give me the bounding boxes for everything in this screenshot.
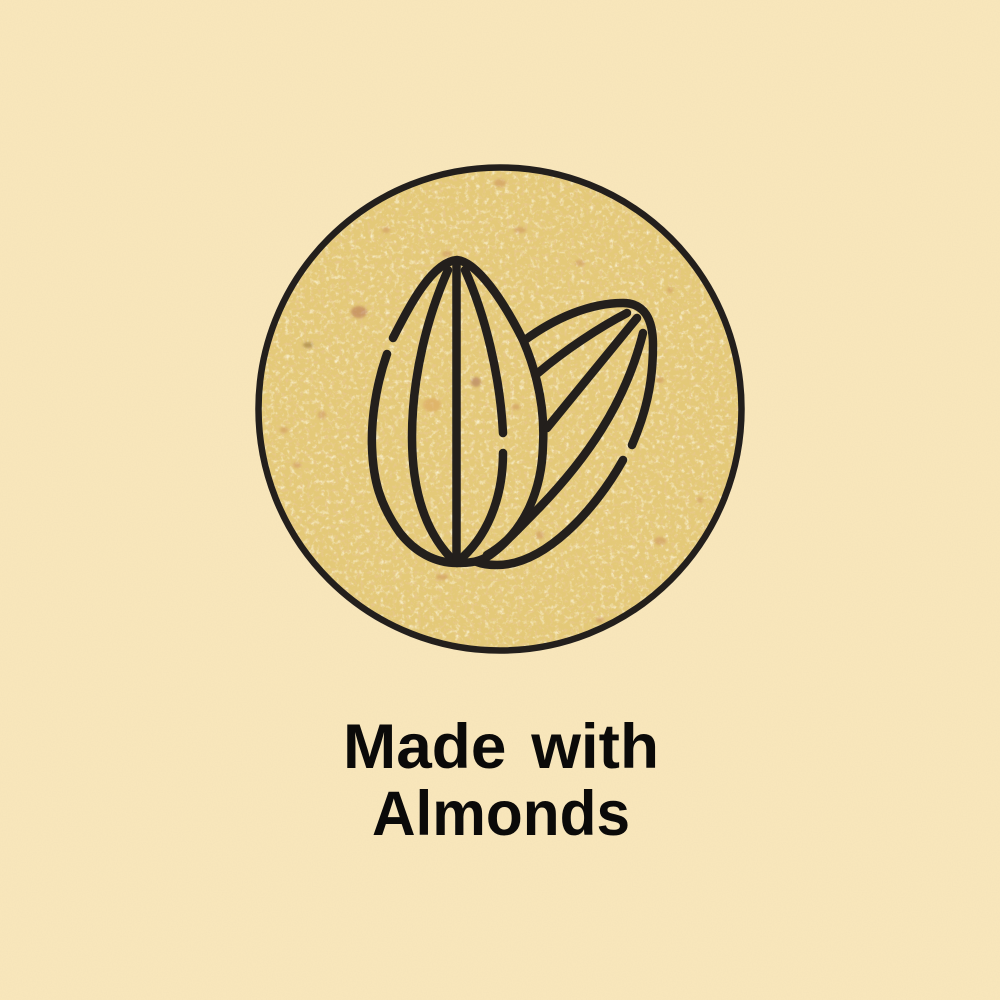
rear almond (477, 303, 653, 565)
title: Made with Almonds (343, 712, 659, 849)
front almond (372, 260, 543, 563)
title: Made with Almonds: Almonds (372, 779, 630, 849)
almond meal circle badge (250, 160, 750, 660)
title: Made with Almonds: Made with (343, 712, 659, 782)
icon: almonds (372, 260, 653, 565)
